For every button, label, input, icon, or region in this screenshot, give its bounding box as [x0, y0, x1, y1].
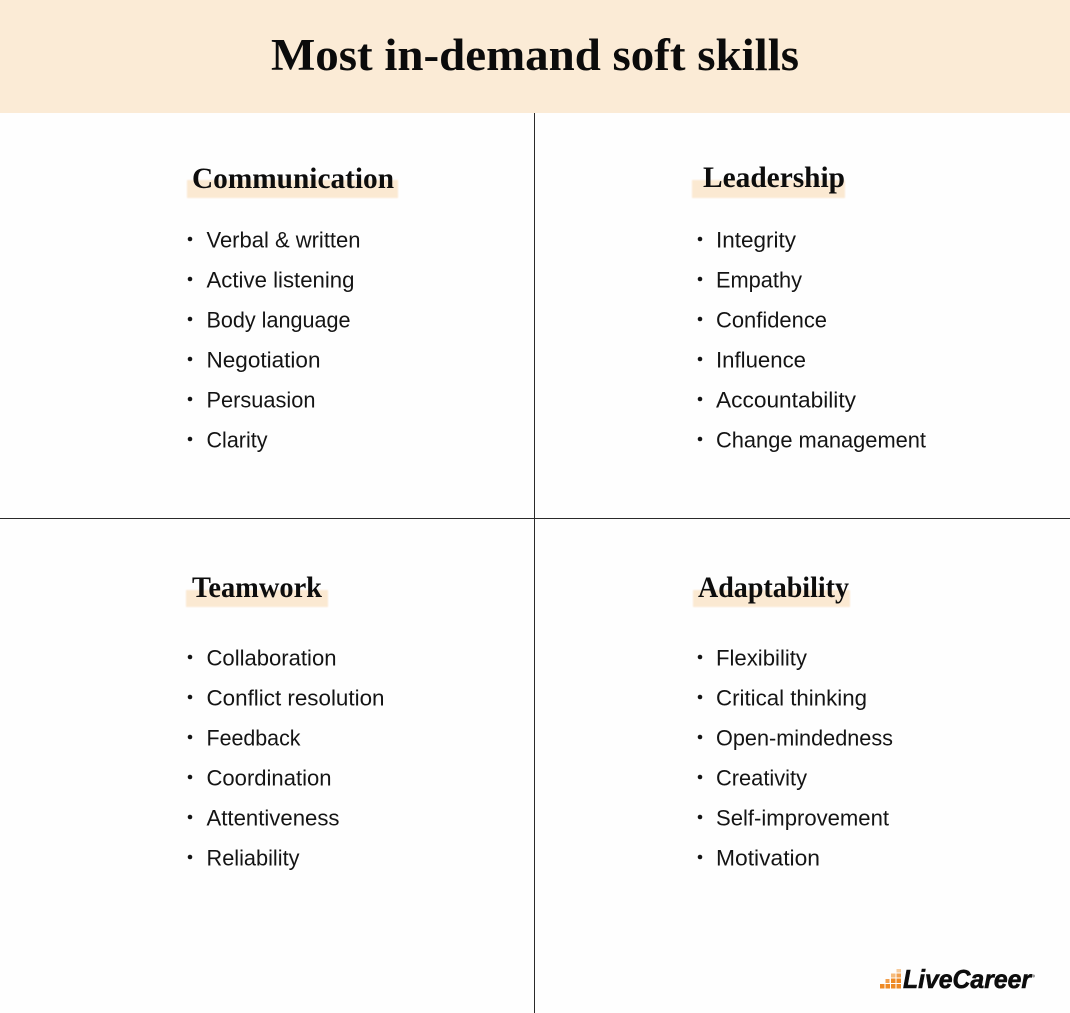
list: leadership skills: Change management	[716, 428, 926, 452]
list: leadership skills: Empathy	[716, 268, 802, 292]
list: adaptability skills: Flexibility	[716, 646, 807, 670]
list: communication skills: Verbal & written	[206, 228, 360, 252]
heading: teamwork: Teamwork	[192, 572, 323, 604]
list: adaptability skills: Motivation	[716, 846, 820, 870]
list: communication skills: Negotiation	[206, 348, 320, 372]
list: adaptability skills: Critical thinking	[716, 686, 867, 710]
heading: communication: Communication	[192, 163, 394, 195]
list: communication skills: Persuasion	[206, 388, 316, 412]
vertical divider	[534, 113, 535, 1013]
list: teamwork skills: Collaboration	[206, 646, 336, 670]
panel: adaptability	[693, 572, 893, 870]
icon: orange dot grid	[880, 969, 901, 988]
list: teamwork skills: Attentiveness	[206, 806, 340, 830]
title: Most in-demand soft skills	[271, 30, 799, 80]
list: leadership skills: Influence	[716, 348, 806, 372]
logo wordmark: LiveCareer	[903, 964, 1033, 994]
list: leadership skills	[698, 228, 926, 452]
panel: teamwork	[186, 572, 384, 870]
logo: LiveCareer	[880, 964, 1035, 994]
list: adaptability skills: Open-mindedness	[716, 726, 893, 750]
heading: adaptability: Adaptability	[698, 572, 849, 604]
list: adaptability skills	[698, 646, 893, 870]
list: teamwork skills: Feedback	[206, 726, 301, 750]
list: leadership skills: Confidence	[716, 308, 827, 332]
list: leadership skills: Accountability	[716, 388, 856, 412]
list: communication skills	[188, 228, 360, 452]
panel: communication	[187, 163, 398, 452]
list: communication skills: Body language	[206, 308, 350, 332]
heading: leadership: Leadership	[703, 162, 845, 194]
list: teamwork skills: Reliability	[206, 846, 300, 870]
list: teamwork skills: Coordination	[206, 766, 332, 790]
header banner	[0, 0, 1070, 113]
horizontal divider	[0, 518, 1070, 519]
list: teamwork skills	[188, 646, 384, 870]
list: adaptability skills: Self-improvement	[716, 806, 889, 830]
list: leadership skills: Integrity	[716, 228, 796, 252]
panel: leadership	[692, 162, 926, 452]
list: teamwork skills: Conflict resolution	[206, 686, 384, 710]
list: adaptability skills: Creativity	[716, 766, 807, 790]
list: communication skills: Clarity	[206, 428, 268, 452]
logo trademark mark	[1032, 974, 1035, 978]
list: communication skills: Active listening	[206, 268, 354, 292]
